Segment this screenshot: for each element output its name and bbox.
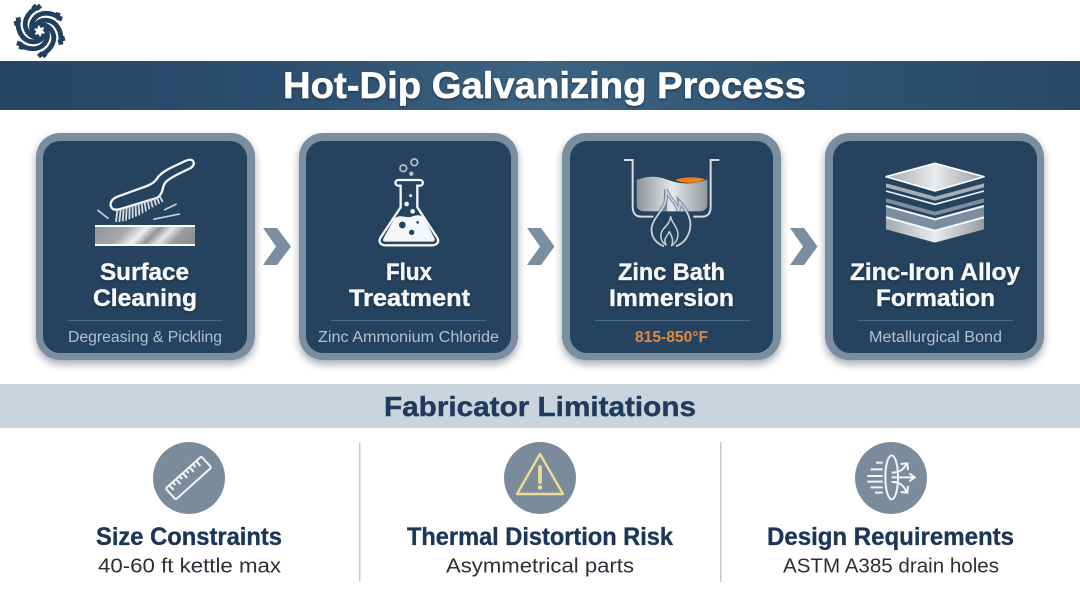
detail: ASTM A385 drain holes	[783, 554, 999, 578]
title: Hot-Dip Galvanizing Process	[283, 65, 806, 106]
icon: flask	[380, 159, 438, 245]
heading: Treatment	[349, 285, 470, 312]
label: Thermal Distortion Risk	[407, 523, 673, 551]
title banner	[0, 61, 1080, 110]
arrow	[263, 228, 291, 265]
section banner: fabricator limitations	[0, 384, 1080, 428]
heading: Zinc Bath	[618, 259, 725, 286]
icon: brush on metal plate	[95, 160, 195, 245]
heading	[93, 259, 197, 312]
icon: zinc bath with flame	[624, 160, 719, 246]
icon: drainage flow	[855, 442, 927, 514]
label: Design Requirements	[767, 523, 1014, 551]
detail: Asymmetrical parts	[446, 554, 634, 578]
subtitle: Metallurgical Bond	[869, 329, 1002, 346]
panel: flux treatment	[299, 133, 518, 360]
limitation: design requirements	[767, 442, 1014, 578]
heading: Immersion	[609, 285, 734, 312]
heading: Formation	[876, 285, 995, 312]
panel: zinc bath immersion	[562, 133, 781, 360]
subtitle: Zinc Ammonium Chloride	[318, 329, 499, 346]
limitation: thermal distortion risk	[407, 442, 673, 578]
panel: zinc-iron alloy formation	[825, 133, 1044, 360]
subtitle: Degreasing & Pickling	[68, 329, 222, 346]
heading: Cleaning	[93, 285, 197, 312]
icon: ruler	[153, 442, 225, 514]
panel: surface cleaning	[36, 133, 255, 360]
detail: 40-60 ft kettle max	[98, 554, 282, 578]
arrow	[790, 228, 818, 265]
icon: alloy layers	[886, 163, 984, 243]
heading: Flux	[386, 259, 433, 286]
heading: Zinc-Iron Alloy	[850, 259, 1021, 286]
arrow	[527, 228, 554, 265]
heading	[850, 259, 1021, 312]
label: Size Constraints	[96, 523, 282, 551]
heading	[349, 259, 470, 312]
icon: warning triangle	[504, 442, 576, 514]
limitation: size constraints	[96, 442, 282, 578]
heading: Surface	[100, 259, 189, 286]
logo: swirl	[10, 6, 69, 56]
heading	[609, 259, 734, 312]
section heading: Fabricator Limitations	[384, 391, 696, 422]
subtitle: temperature: 815-850°F	[635, 329, 708, 346]
